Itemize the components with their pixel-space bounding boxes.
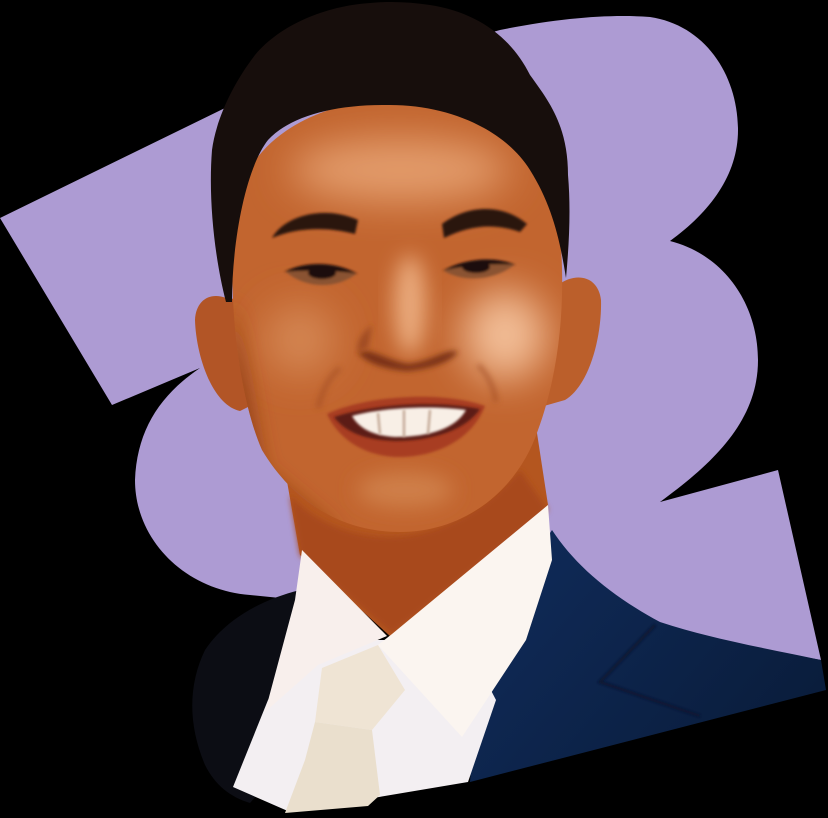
lips: [327, 397, 485, 457]
neck shadow: [290, 470, 548, 634]
left collar: [265, 550, 387, 712]
lapel crease: [600, 625, 700, 716]
teeth: [352, 408, 466, 437]
left cheek highlight: [264, 304, 336, 376]
tie: [285, 645, 405, 813]
left eyebrow: [272, 213, 358, 238]
nose wing shadow: [358, 325, 372, 352]
mouth interior: [334, 404, 480, 441]
right ear: [530, 277, 601, 410]
jaw shadow: [234, 320, 330, 515]
nose highlight: [394, 255, 426, 355]
face: [232, 98, 562, 532]
right eye: [442, 259, 516, 278]
face shading: [225, 138, 547, 535]
right eyebrow: [442, 209, 527, 238]
right cheek highlight: [463, 290, 547, 380]
chin highlight: [357, 472, 453, 508]
left eye: [284, 264, 358, 285]
neck: [285, 420, 548, 636]
smile lines: [318, 365, 496, 408]
hair: [211, 2, 569, 302]
jacket left side: [192, 590, 340, 803]
left ear: [195, 296, 262, 411]
nose: [358, 325, 458, 371]
tie knot: [315, 645, 405, 730]
suit jacket: [192, 530, 826, 803]
nose bottom shadow: [358, 351, 458, 371]
right collar: [378, 505, 552, 737]
jacket right side: [470, 530, 826, 782]
mouth: [327, 397, 485, 457]
tooth gaps: [378, 410, 430, 437]
tie blade: [285, 722, 380, 813]
shirt collar: [265, 505, 552, 737]
purple backdrop shape: [0, 16, 821, 660]
white shirt body: [233, 640, 496, 812]
forehead highlight: [290, 138, 510, 202]
